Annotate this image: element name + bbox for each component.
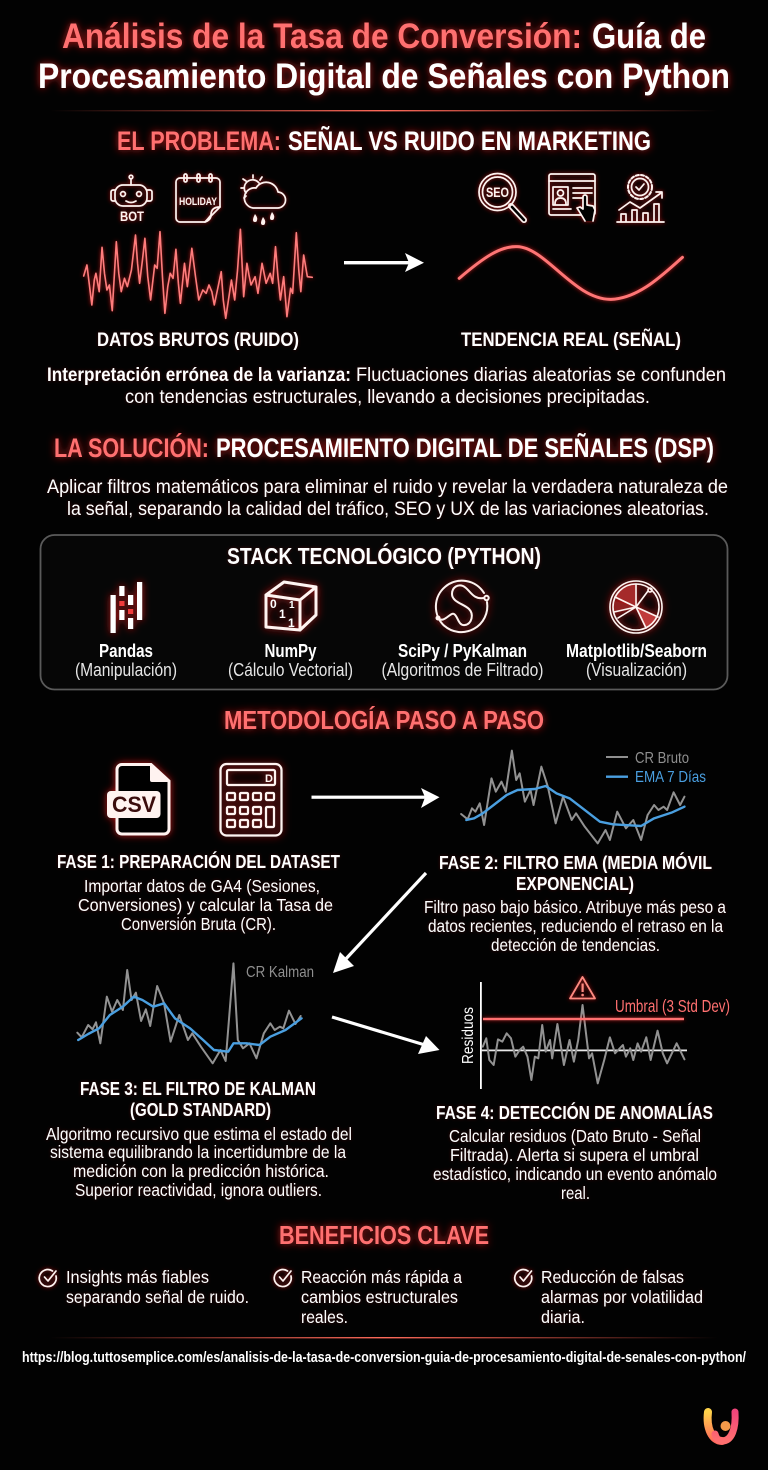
text: insights	[66, 1267, 249, 1307]
chart: kalman filter	[77, 963, 302, 1063]
chart: noisy raw signal	[84, 229, 312, 318]
text: reaction: Reacción más rápida a	[301, 1267, 462, 1287]
icon: seo	[479, 174, 524, 220]
label: numpy: NumPy	[264, 641, 316, 661]
title	[38, 17, 730, 96]
text: fase 4	[433, 1126, 717, 1203]
label: scipy	[382, 641, 544, 680]
icon: check	[515, 1270, 532, 1287]
chart: smooth real trend	[459, 247, 682, 299]
text: fase 2: datos recientes, reduciendo el retraso en la	[428, 916, 723, 936]
icon: numpy cube: 1	[288, 616, 295, 630]
legend: ema chart	[606, 750, 706, 786]
icon: calculator: D	[265, 773, 273, 785]
text: fase 4: estadístico, indicando un evento anómalo	[433, 1164, 717, 1184]
text: fase 1	[78, 876, 333, 934]
heading: fase 3	[80, 1079, 316, 1120]
icon: ux browser	[549, 174, 595, 221]
label: scipy: (Algoritmos de Filtrado)	[382, 660, 544, 680]
heading: fase 2	[439, 852, 712, 894]
heading: el problema	[117, 126, 651, 156]
heading: metodologia: METODOLOGÍA PASO A PASO	[224, 706, 544, 735]
heading: fase 1: FASE 1: PREPARACIÓN DEL DATASET	[57, 851, 340, 872]
panel: fase 4	[433, 977, 730, 1203]
icon: numpy cube: 0	[270, 597, 277, 611]
text: variance misinterpretation: Interpretación errónea de la varianza:	[47, 364, 351, 386]
legend: ema chart: CR Bruto	[635, 750, 689, 767]
arrow: fase 3 to fase 4	[332, 1017, 440, 1054]
text: variance misinterpretation	[47, 364, 726, 408]
arrow: fase 1 to fase 2	[312, 788, 440, 808]
heading: fase 3: (GOLD STANDARD)	[130, 1100, 271, 1120]
panel: fase 1	[57, 764, 340, 934]
chart: residuals	[460, 982, 687, 1089]
heading: beneficios clave: BENEFICIOS CLAVE	[279, 1222, 489, 1250]
text: fase 2: Filtro paso bajo básico. Atribuye más peso a	[424, 897, 726, 917]
icon: seo: SEO	[486, 184, 509, 200]
text: fase 1: Importar datos de GA4 (Sesiones,	[84, 876, 320, 896]
section: la solucion	[47, 433, 728, 520]
icon: warning triangle	[570, 977, 595, 998]
label: pandas	[75, 641, 177, 680]
text: reaction: cambios estructurales	[301, 1287, 458, 1307]
text: fase 1: Conversión Bruta (CR).	[121, 914, 276, 934]
icon: check	[274, 1270, 291, 1287]
text: fase 4: Filtrada). Alerta si supera el umbral	[450, 1145, 699, 1165]
arrow: fase 2 to fase 3	[333, 873, 426, 973]
text: reaction	[301, 1267, 462, 1327]
benefit: reaction	[274, 1267, 462, 1327]
text: variance misinterpretation: Fluctuaciones diarias aleatorias se confunden	[356, 364, 726, 386]
text: fase 3	[46, 1124, 352, 1200]
heading: fase 4: FASE 4: DETECCIÓN DE ANOMALÍAS	[436, 1102, 713, 1123]
text: solution description	[47, 476, 728, 520]
icon: bot	[111, 175, 152, 224]
icon: csv file: CSV	[112, 792, 156, 817]
text: insights: separando señal de ruido.	[66, 1287, 249, 1307]
text: fase 4: real.	[561, 1183, 590, 1203]
heading: stack: STACK TECNOLÓGICO (PYTHON)	[227, 542, 541, 569]
label: matplotlib: Matplotlib/Seaborn	[566, 641, 707, 661]
icon: matplotlib	[610, 581, 662, 633]
label: scipy: SciPy / PyKalman	[398, 641, 527, 661]
heading: la solucion	[54, 433, 714, 463]
panel: fase 3	[46, 963, 352, 1200]
legend: ema chart: EMA 7 Días	[635, 769, 706, 786]
text: fase 1: Conversiones) y calcular la Tasa de	[78, 895, 333, 915]
heading: la solucion: LA SOLUCIÓN:	[54, 433, 209, 463]
icon: weather	[241, 175, 286, 225]
icon: calculator	[220, 764, 282, 836]
text: fase 3: Superior reactividad, ignora outliers.	[75, 1180, 322, 1200]
chart: ema filter	[461, 751, 684, 843]
text: solution description: Aplicar filtros matemáticos para eliminar el ruido y revelar la verdadera naturaleza de	[47, 476, 728, 498]
text: fase 2	[424, 897, 726, 955]
icon: growth chart	[617, 175, 664, 222]
benefit: insights	[39, 1267, 249, 1307]
panel: fase 2	[424, 750, 726, 955]
text: false alarms: diaria.	[541, 1307, 585, 1327]
icon: scipy	[436, 581, 489, 632]
arrow: noise to signal	[344, 253, 424, 272]
text: solution description: la señal, separando la calidad del tráfico, SEO y UX de las variaciones aleatorias.	[67, 498, 709, 520]
label: cr kalman: CR Kalman	[246, 964, 314, 981]
panel: python stack	[40, 535, 728, 690]
icon: numpy cube: 1	[279, 607, 286, 621]
label: pandas: Pandas	[99, 641, 153, 661]
icon: holiday calendar: HOLIDAY	[179, 196, 218, 208]
icon: pandas	[110, 582, 142, 633]
axis label: residuos: Residuos	[460, 1007, 477, 1064]
text: false alarms	[541, 1267, 703, 1327]
heading: fase 2: FASE 2: FILTRO EMA (MEDIA MÓVIL	[439, 852, 712, 873]
text: fase 3: medición con la predicción histórica.	[73, 1161, 329, 1181]
heading: fase 3: FASE 3: EL FILTRO DE KALMAN	[80, 1079, 316, 1099]
text: fase 3: Algoritmo recursivo que estima el estado del	[46, 1124, 352, 1144]
title: Análisis de la Tasa de Conversión:	[62, 17, 582, 56]
label: threshold: Umbral (3 Std Dev)	[615, 996, 730, 1016]
icon: numpy cube: 1	[289, 600, 295, 611]
text: fase 2: detección de tendencias.	[491, 935, 660, 955]
label: matplotlib	[566, 641, 707, 680]
icon: holiday calendar	[176, 174, 220, 222]
logo	[708, 1412, 735, 1441]
section: el problema	[47, 126, 726, 408]
icon: bot: BOT	[120, 209, 145, 224]
heading: el problema: EL PROBLEMA:	[117, 126, 281, 156]
label: pandas: (Manipulación)	[75, 660, 177, 680]
label: raw data: DATOS BRUTOS (RUIDO)	[97, 330, 299, 351]
heading: el problema: SEÑAL VS RUIDO EN MARKETING	[288, 126, 651, 156]
text: variance misinterpretation: con tendencias estructurales, llevando a decisiones precipitadas.	[125, 386, 650, 408]
text: reaction: reales.	[301, 1307, 348, 1327]
title: Guía de	[592, 17, 706, 56]
icon: csv file	[107, 764, 169, 834]
text: insights: Insights más fiables	[66, 1267, 209, 1287]
text: fase 3: sistema equilibrando la incertidumbre de la	[50, 1142, 346, 1162]
text: false alarms: Reducción de falsas	[541, 1267, 684, 1287]
text: false alarms: alarmas por volatilidad	[541, 1287, 703, 1307]
icon: numpy cube	[266, 582, 316, 630]
text: fase 4: Calcular residuos (Dato Bruto - Señal	[449, 1126, 701, 1146]
heading: fase 2: EXPONENCIAL)	[516, 874, 634, 894]
label: real trend: TENDENCIA REAL (SEÑAL)	[461, 329, 681, 351]
label: numpy	[228, 641, 353, 680]
label: matplotlib: (Visualización)	[586, 660, 687, 680]
label: numpy: (Cálculo Vectorial)	[228, 660, 353, 680]
icon: check	[39, 1270, 56, 1287]
threshold line	[483, 1018, 684, 1020]
benefit: false alarms	[515, 1267, 703, 1327]
